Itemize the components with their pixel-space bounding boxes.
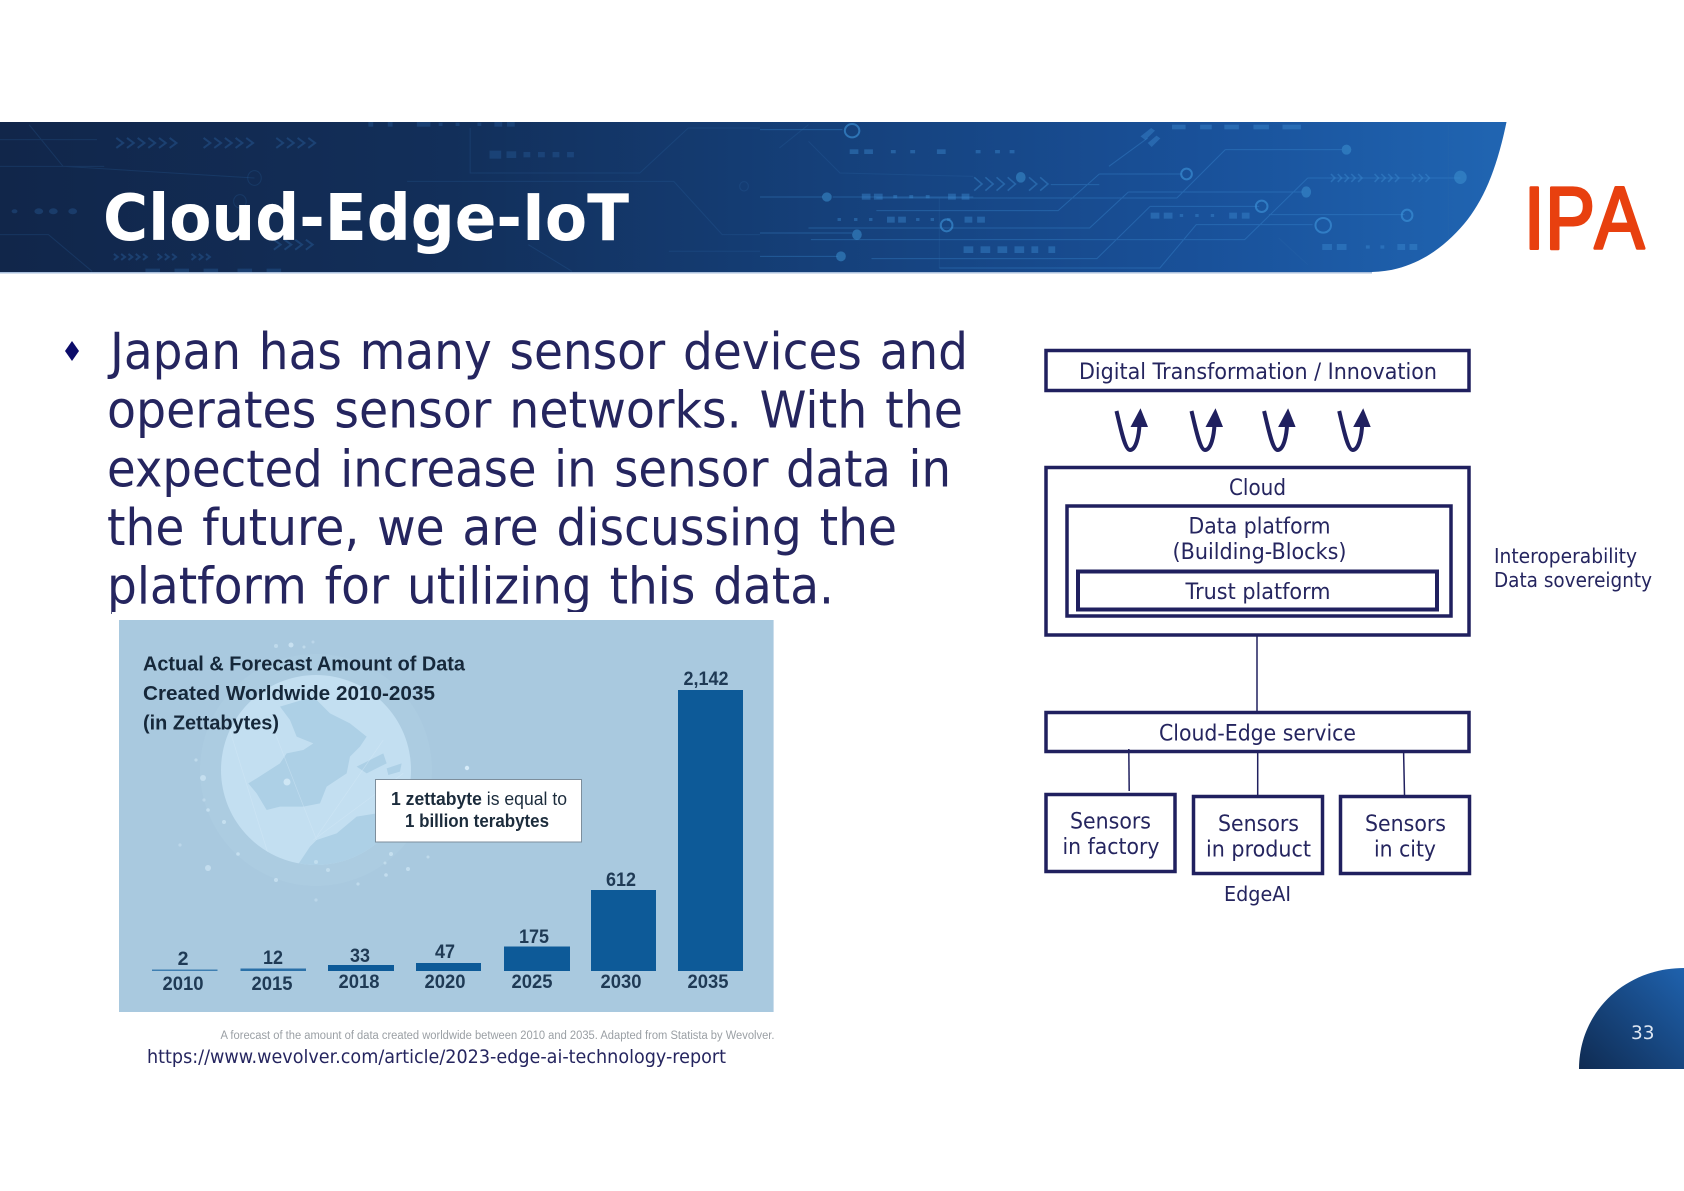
- panel: data platform: [1067, 506, 1451, 616]
- panel: cloud: [1046, 468, 1469, 635]
- globe illustration: [178, 640, 469, 902]
- bar chart: 612: [606, 869, 636, 891]
- page number corner: [1579, 968, 1684, 1069]
- box: sensors in product: in product: [1206, 838, 1311, 862]
- chart panel: data created worldwide: [119, 620, 774, 1012]
- box: sensors in factory: Sensors: [1070, 810, 1151, 835]
- note: interoperability and data sovereignty: Data sovereignty: [1494, 568, 1652, 592]
- bar chart: 47: [435, 941, 455, 963]
- box: digital transformation: Digital Transformation / Innovation: [1079, 360, 1437, 385]
- bar chart: 2,142: [684, 668, 729, 690]
- panel: cloud: Cloud: [1229, 476, 1286, 501]
- chart title: [143, 654, 466, 734]
- bar chart: [152, 668, 743, 995]
- box: sensors in factory: [1046, 794, 1175, 872]
- icon: bullet diamond: [65, 341, 79, 361]
- panel: data platform: Data platform: [1188, 515, 1330, 540]
- bar chart: 2020: [424, 971, 466, 993]
- bar chart: 2: [178, 948, 189, 970]
- callout: zettabyte definition: [376, 780, 582, 842]
- box: sensors in city: [1340, 796, 1470, 874]
- bar chart: 175: [519, 926, 549, 948]
- note: interoperability and data sovereignty: Interoperability: [1494, 544, 1637, 568]
- bar chart: 2025: [512, 971, 553, 993]
- chart caption: A forecast of the amount of data created worldwide between 2010 and 2035. Adapted from Statista by Wevolver.: [220, 1030, 774, 1042]
- box: sensors in city: Sensors: [1365, 812, 1446, 837]
- architecture diagram: [1046, 350, 1652, 906]
- note: interoperability and data sovereignty: [1494, 544, 1652, 592]
- source url: https://www.wevolver.com/article/2023-edge-ai-technology-report: [147, 1046, 726, 1068]
- bar chart: 12: [263, 947, 283, 969]
- callout: zettabyte definition: 1 zettabyte is equal to: [391, 789, 567, 809]
- bullet text block: the future, we are discussing the: [107, 498, 897, 557]
- bullet text block: expected increase in sensor data in: [107, 439, 951, 498]
- box: sensors in city: in city: [1374, 838, 1436, 862]
- bar chart: 2018: [338, 971, 380, 993]
- box: sensors in product: [1194, 796, 1322, 874]
- bullet text block: platform for utilizing this data.: [107, 557, 834, 616]
- box: cloud-edge service: [1046, 712, 1469, 752]
- bullet text block: operates sensor networks. With the: [107, 381, 963, 440]
- box: sensors in product: Sensors: [1218, 812, 1299, 837]
- header banner: [0, 122, 1506, 274]
- bar chart: 33: [350, 945, 370, 967]
- page number corner: 33: [1631, 1022, 1654, 1044]
- chart title: Created Worldwide 2010-2035: [143, 683, 435, 705]
- bullet text block: [65, 322, 968, 616]
- bar chart: 2015: [252, 973, 293, 995]
- box: trust platform: Trust platform: [1185, 580, 1330, 605]
- IPA logo: IPA: [1524, 170, 1645, 268]
- box: trust platform: [1078, 572, 1437, 610]
- box: digital transformation: [1046, 350, 1469, 390]
- connectors: service to sensors: [1129, 749, 1404, 795]
- label: EdgeAI: EdgeAI: [1224, 882, 1291, 906]
- chart title: Actual & Forecast Amount of Data: [143, 654, 466, 676]
- panel: data platform: (Building-Blocks): [1172, 540, 1346, 565]
- title: Cloud-Edge-IoT: [103, 182, 629, 256]
- bar chart: 2010: [162, 973, 204, 995]
- bar chart: 2030: [600, 971, 642, 993]
- bullet text block: Japan has many sensor devices and: [107, 322, 968, 381]
- callout: zettabyte definition: 1 billion terabytes: [405, 811, 549, 831]
- box: cloud-edge service: Cloud-Edge service: [1159, 722, 1356, 747]
- bar chart: 2035: [688, 971, 729, 993]
- arrows: cloud to innovation: [1116, 408, 1371, 450]
- connector: cloud to cloud-edge service: [1256, 636, 1258, 711]
- box: sensors in factory: in factory: [1062, 835, 1160, 860]
- chart title: (in Zettabytes): [143, 712, 279, 734]
